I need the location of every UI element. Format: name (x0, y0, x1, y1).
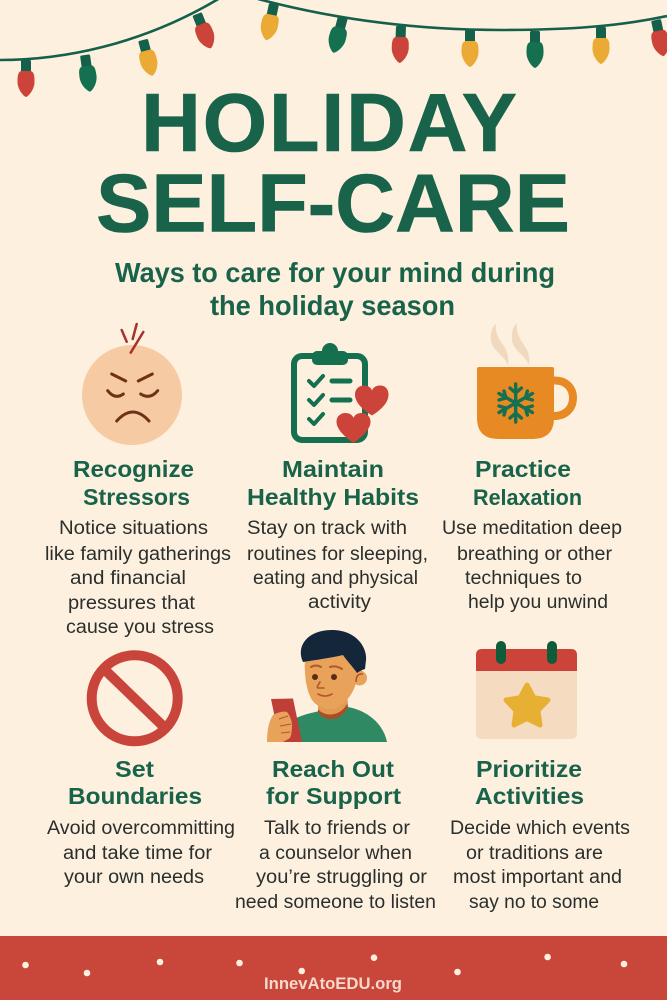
text: maintain healthy habits: eating and physical (253, 568, 418, 589)
heading: set boundaries (68, 756, 202, 809)
footer band (0, 936, 667, 1000)
heading: set boundaries: Boundaries (68, 783, 202, 809)
text: reach out for support (235, 818, 436, 913)
text: recognize stressors: and financial (70, 568, 186, 589)
text: recognize stressors: cause you stress (66, 617, 214, 638)
text: reach out for support: Talk to friends or (264, 818, 411, 839)
text: recognize stressors (45, 518, 231, 638)
text: set boundaries: Avoid overcommitting (47, 818, 235, 839)
heading: recognize stressors (73, 456, 194, 510)
icon: mug with snowflake (477, 323, 573, 439)
icon: stressed face (82, 324, 182, 445)
text: practice relaxation: help you unwind (468, 592, 608, 613)
icon: person with phone (267, 630, 387, 742)
text: practice relaxation: techniques to (465, 568, 582, 589)
text: maintain healthy habits: routines for sleeping, (247, 544, 428, 565)
heading: practice relaxation: Relaxation (473, 485, 582, 510)
heading: maintain healthy habits: Maintain (282, 456, 384, 482)
heading: practice relaxation: Practice (475, 456, 571, 482)
text: recognize stressors: pressures that (68, 593, 196, 614)
garland: string lights (0, 0, 667, 97)
subtitle: the holiday season (210, 290, 455, 321)
text: prioritize activities (450, 818, 630, 913)
text: set boundaries (47, 818, 235, 888)
text: prioritize activities: or traditions are (466, 843, 603, 864)
heading: practice relaxation (473, 456, 582, 510)
text: practice relaxation: breathing or other (457, 544, 613, 565)
footer text: InnevAtoEDU.org (264, 975, 402, 993)
text: recognize stressors: Notice situations (59, 518, 208, 539)
heading: recognize stressors: Stressors (83, 484, 190, 510)
icon: prohibition sign (92, 655, 178, 741)
heading: prioritize activities (475, 756, 584, 809)
text: practice relaxation (442, 518, 622, 613)
heading: set boundaries: Set (115, 756, 154, 782)
icon: clipboard with hearts (294, 343, 388, 443)
heading: maintain healthy habits: Healthy Habits (247, 484, 419, 510)
text: maintain healthy habits: Stay on track with (247, 518, 407, 539)
heading: reach out for support (266, 756, 401, 809)
text: reach out for support: need someone to listen (235, 892, 436, 913)
heading: reach out for support: for Support (266, 783, 401, 809)
text: practice relaxation: Use meditation deep (442, 518, 622, 539)
heading: recognize stressors: Recognize (73, 456, 194, 482)
title: SELF-CARE (96, 156, 570, 250)
text: recognize stressors: like family gatherings (45, 544, 231, 565)
icon: calendar with star (476, 641, 577, 739)
text: reach out for support: a counselor when (259, 843, 412, 864)
text: set boundaries: your own needs (64, 867, 204, 888)
heading: prioritize activities: Prioritize (476, 756, 582, 782)
text: prioritize activities: most important and (453, 867, 622, 888)
text: maintain healthy habits (247, 518, 428, 613)
heading: prioritize activities: Activities (475, 783, 584, 809)
title: HOLIDAY (141, 76, 517, 169)
text: maintain healthy habits: activity (308, 592, 372, 613)
heading: reach out for support: Reach Out (272, 756, 394, 782)
text: prioritize activities: Decide which events (450, 818, 630, 839)
text: set boundaries: and take time for (63, 843, 213, 864)
text: prioritize activities: say no to some (469, 892, 599, 913)
title (96, 76, 570, 250)
text: reach out for support: you’re struggling or (256, 867, 428, 888)
subtitle (115, 257, 555, 321)
heading: maintain healthy habits (247, 456, 419, 510)
subtitle: Ways to care for your mind during (115, 257, 555, 288)
